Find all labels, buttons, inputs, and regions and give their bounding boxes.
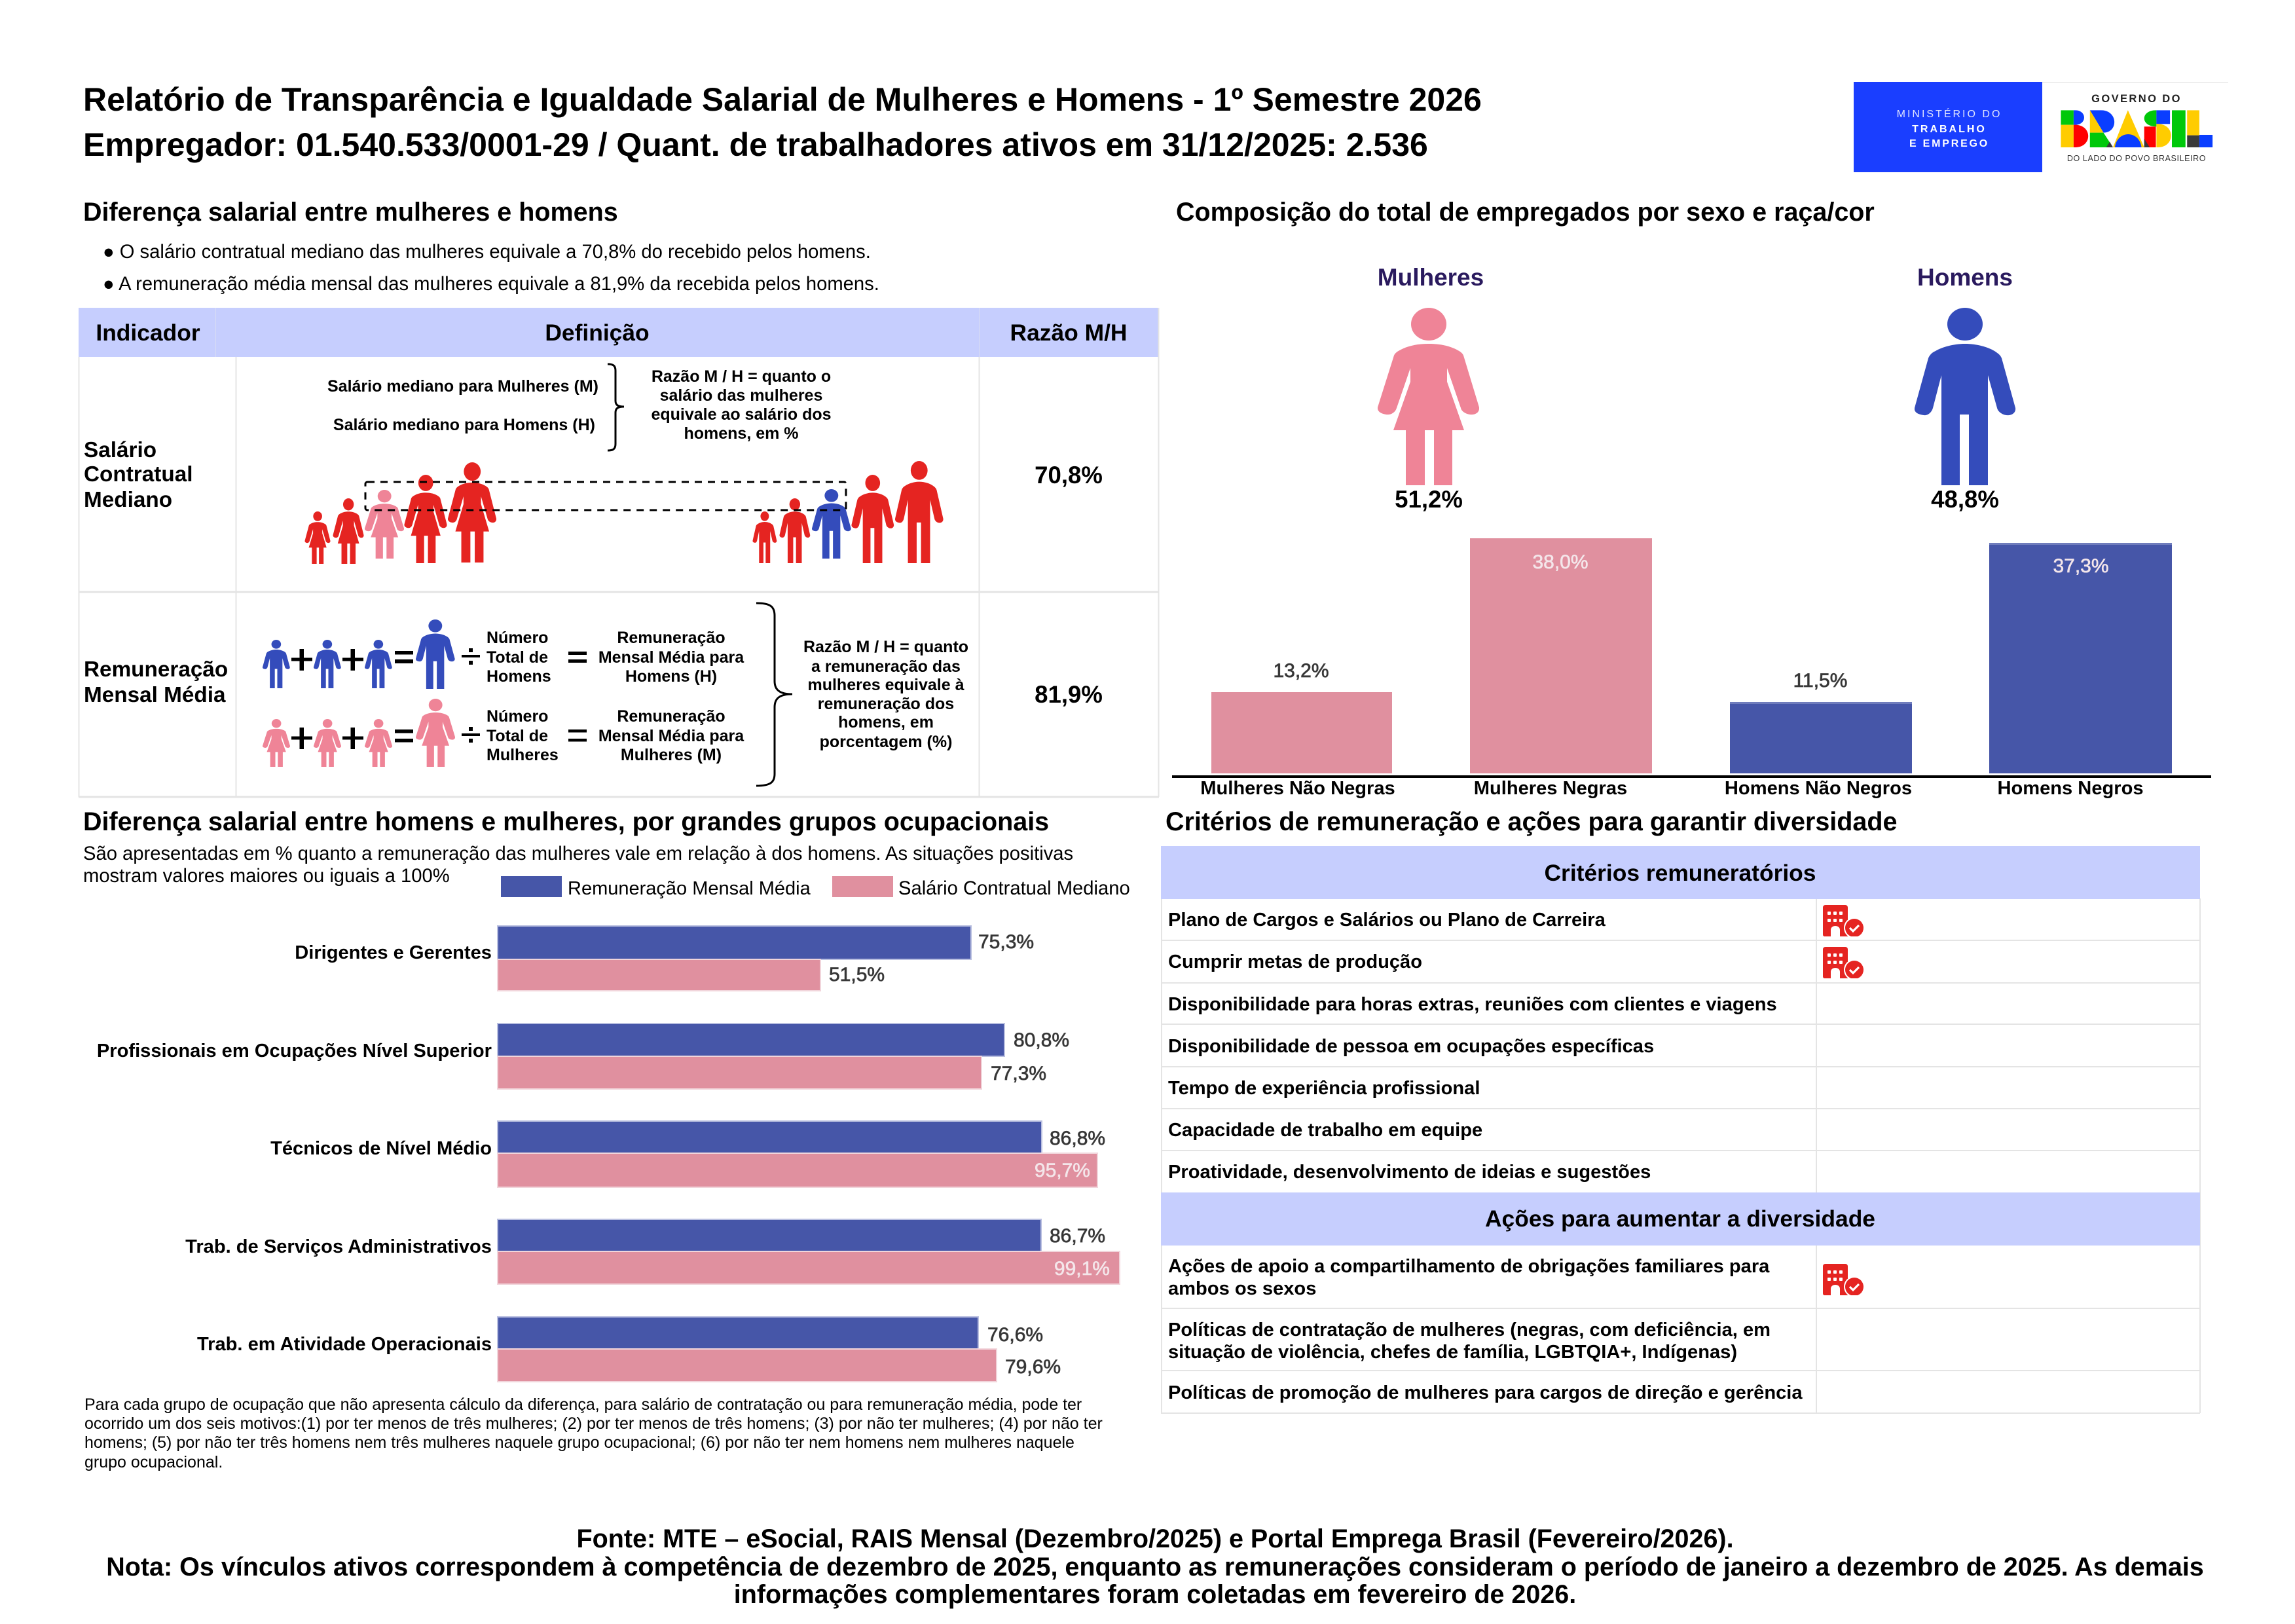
heading: diferença por grupos ocupacionais: Diferença salarial entre homens e mulheres, por grandes grupos ocupacionais: [83, 807, 1049, 836]
group: profissionais: 77,3%: [991, 1063, 1046, 1084]
group: técnicos: Técnicos de Nível Médio: [270, 1138, 492, 1159]
rows: ações: Políticas de contratação de mulheres (negras, com deficiência, em: [1168, 1320, 1771, 1340]
formula: women: Mensal Média para: [598, 727, 744, 745]
rows: critérios: Plano de Cargos e Salários ou Plano de Carreira: [1168, 910, 1606, 931]
row: salário contratual mediano: Salário mediano para Homens (H): [333, 416, 595, 434]
group: profissionais: 80,8%: [1014, 1029, 1069, 1051]
rows: critérios: Proatividade, desenvolvimento de ideias e sugestões: [1168, 1162, 1651, 1183]
row: salário contratual mediano: Contratual: [84, 462, 193, 487]
bar chart: composição por sexo e raça: 11,5%: [1793, 670, 1847, 692]
panel: homens share: 48,8%: [1931, 486, 1999, 513]
row: salário contratual mediano: homens, em %: [684, 424, 799, 443]
icon: building check 1: [1823, 905, 1865, 938]
footnote: [84, 1395, 1103, 1471]
footer: source and note: [106, 1524, 2204, 1609]
panel: homens share: Homens: [1917, 264, 2013, 291]
formula: men: Número: [487, 629, 548, 647]
rows: ações: situação de violência, chefes de família, LGBTQIA+, Indígenas): [1168, 1342, 1737, 1363]
table header: Indicador: [96, 320, 200, 346]
panel: indicator table: [79, 308, 1159, 797]
row: remuneração mensal média: Remuneração: [84, 657, 228, 682]
group: dirigentes e gerentes: 51,5%: [829, 964, 885, 986]
formula: women: Total de: [487, 727, 548, 745]
group: dirigentes e gerentes: Dirigentes e Gerentes: [295, 942, 492, 963]
formula: women: Mulheres: [487, 746, 559, 764]
bar chart: composição por sexo e raça: 37,3%: [2053, 555, 2109, 577]
formula: men: Mensal Média para: [598, 648, 744, 667]
bar chart: composição por sexo e raça: [1172, 538, 2211, 799]
row: remuneração mensal média: remuneração dos: [818, 695, 954, 713]
bar chart: composição por sexo e raça: 38,0%: [1532, 551, 1588, 573]
group: dirigentes e gerentes: 75,3%: [978, 931, 1034, 953]
footnote: ocorrido um dos seis motivos:(1) por ter menos de três mulheres; (2) por ter menos de três homens; (3) por não ter mulheres; (4) por não ter: [84, 1414, 1103, 1433]
row: salário contratual mediano: [84, 364, 1103, 564]
panel: mulheres share: Mulheres: [1378, 264, 1484, 291]
row: salário contratual mediano: salário das mulheres: [660, 386, 822, 405]
row: remuneração mensal média: 81,9%: [1035, 681, 1103, 708]
formula: men: Homens (H): [625, 667, 717, 686]
group: atividade operacionais: 79,6%: [1005, 1356, 1061, 1378]
bullet points: ● A remuneração média mensal das mulheres equivale a 81,9% da recebida pelos homens.: [103, 274, 879, 295]
panel: mulheres share: 51,2%: [1395, 486, 1463, 513]
text: chart description: mostram valores maiores ou iguais a 100%: [83, 866, 450, 887]
group: profissionais: [97, 1024, 1069, 1089]
rows: critérios: Cumprir metas de produção: [1168, 951, 1422, 972]
bar chart: composição por sexo e raça: Mulheres Não Negras: [1200, 778, 1395, 799]
row: remuneração mensal média: homens, em: [838, 713, 934, 731]
bullet points: [103, 242, 879, 295]
header: critérios remuneratórios: Critérios remuneratórios: [1545, 860, 1816, 886]
footnote: grupo ocupacional.: [84, 1453, 223, 1471]
formula: men: Remuneração: [617, 629, 725, 647]
group: serviços administrativos: 86,7%: [1050, 1225, 1105, 1247]
row: remuneração mensal média: porcentagem (%): [820, 733, 952, 751]
logo: governo do brasil: [2042, 82, 2228, 163]
footer: source and note: informações complementares foram coletadas em fevereiro de 2026.: [734, 1580, 1576, 1609]
header: ações: [1161, 1192, 2200, 1246]
title: [83, 81, 1482, 163]
formula: men: [263, 619, 744, 689]
group: técnicos: [270, 1121, 1105, 1187]
formula: women: Remuneração: [617, 707, 725, 726]
title: Relatório de Transparência e Igualdade Salarial de Mulheres e Homens - 1º Semestre 2026: [83, 81, 1482, 118]
table header: [79, 308, 1159, 357]
group: serviços administrativos: [185, 1219, 1120, 1284]
row: remuneração mensal média: [84, 603, 1103, 786]
rows: critérios: Capacidade de trabalho em equipe: [1168, 1120, 1482, 1141]
rows: ações: Ações de apoio a compartilhamento de obrigações familiares para: [1168, 1256, 1770, 1277]
header: critérios remuneratórios: [1161, 846, 2200, 899]
row: salário contratual mediano: Salário: [84, 438, 156, 462]
footer: source and note: Fonte: MTE – eSocial, RAIS Mensal (Dezembro/2025) e Portal Emprega Brasil (Fevereiro/2026).: [576, 1524, 1734, 1553]
group: profissionais: Profissionais em Ocupações Nível Superior: [97, 1041, 492, 1061]
footnote: homens; (5) por não ter três homens nem três mulheres naquele grupo ocupacional; (6) por não ter nem homens nem mulheres naquele: [84, 1433, 1074, 1452]
row: remuneração mensal média: Razão M / H = quanto: [803, 638, 968, 656]
title: Empregador: 01.540.533/0001-29 / Quant. de trabalhadores ativos em 31/12/2025: 2.536: [83, 126, 1428, 163]
logo: ministério do trabalho e emprego: E EMPREGO: [1909, 138, 1989, 149]
logo: ministério do trabalho e emprego: MINISTÉRIO DO: [1897, 107, 2002, 120]
legend: [501, 876, 1130, 899]
legend: Salário Contratual Mediano: [898, 878, 1130, 899]
bullet points: ● O salário contratual mediano das mulheres equivale a 70,8% do recebido pelos homens.: [103, 242, 871, 263]
panel: homens share: [1915, 264, 2015, 513]
row: remuneração mensal média: a remuneração das: [811, 657, 961, 676]
logo: governo do brasil: GOVERNO DO: [2091, 93, 2182, 105]
header: ações: Ações para aumentar a diversidade: [1485, 1206, 1875, 1232]
formula: women: Mulheres (M): [621, 746, 722, 764]
heading: critérios: Critérios de remuneração e ações para garantir diversidade: [1166, 807, 1897, 836]
row: salário contratual mediano: Salário mediano para Mulheres (M): [327, 377, 598, 396]
row: remuneração mensal média: Mensal Média: [84, 683, 226, 707]
group: atividade operacionais: 76,6%: [987, 1324, 1043, 1346]
row: salário contratual mediano: equivale ao salário dos: [651, 405, 832, 424]
bar chart: grupos ocupacionais: [97, 926, 1120, 1382]
formula: men: Total de: [487, 648, 548, 667]
table header: Definição: [545, 320, 650, 346]
rows: critérios: Tempo de experiência profissional: [1168, 1078, 1480, 1099]
group: atividade operacionais: [197, 1317, 1061, 1382]
text: chart description: São apresentadas em % quanto a remuneração das mulheres vale em relação à dos homens. As situações positivas: [83, 843, 1073, 864]
rows: ações: ambos os sexos: [1168, 1278, 1316, 1299]
row: remuneração mensal média: mulheres equivale à: [807, 676, 964, 694]
icon: building check 2: [1823, 947, 1865, 980]
heading: diferença salarial: Diferença salarial entre mulheres e homens: [83, 198, 618, 227]
bar chart: composição por sexo e raça: 13,2%: [1273, 660, 1329, 682]
rows: critérios: [1168, 910, 1777, 1183]
rows: ações: Políticas de promoção de mulheres para cargos de direção e gerência: [1168, 1382, 1803, 1403]
logo: ministério do trabalho e emprego: TRABALHO: [1912, 124, 1987, 135]
logo: ministério do trabalho e emprego: [1854, 82, 2042, 172]
icon: building check 3: [1823, 1264, 1865, 1297]
footer: source and note: Nota: Os vínculos ativos correspondem à competência de dezembro de 2025, enquanto as remunerações consideram o período de janeiro a dezembro de 2025. As demais: [106, 1553, 2204, 1581]
group: dirigentes e gerentes: [295, 926, 1034, 991]
icon: men by salary: [752, 461, 944, 563]
row: salário contratual mediano: 70,8%: [1035, 462, 1103, 489]
group: técnicos: 86,8%: [1050, 1128, 1105, 1149]
bar chart: composição por sexo e raça: Homens Negros: [1997, 778, 2144, 799]
icon: women by salary: [304, 462, 496, 564]
table header: Razão M/H: [1010, 320, 1127, 346]
text: chart description: [83, 843, 1073, 887]
formula: women: Número: [487, 707, 548, 726]
footnote: Para cada grupo de ocupação que não apresenta cálculo da diferença, para salário de contratação ou para remuneração média, pode ter: [84, 1395, 1082, 1414]
group: serviços administrativos: 99,1%: [1054, 1258, 1110, 1280]
row: salário contratual mediano: Mediano: [84, 488, 172, 512]
group: serviços administrativos: Trab. de Serviços Administrativos: [185, 1236, 492, 1257]
bar chart: composição por sexo e raça: Homens Não Negros: [1725, 778, 1912, 799]
rows: ações: [1168, 1256, 1803, 1403]
group: técnicos: 95,7%: [1035, 1160, 1090, 1181]
bar chart: composição por sexo e raça: Mulheres Negras: [1474, 778, 1627, 799]
logo: governo do brasil: DO LADO DO POVO BRASILEIRO: [2067, 154, 2206, 163]
panel: mulheres share: [1378, 264, 1484, 513]
panel: critérios table: [1161, 846, 2200, 1413]
rows: critérios: Disponibilidade de pessoa em ocupações específicas: [1168, 1036, 1654, 1057]
rows: critérios: Disponibilidade para horas extras, reuniões com clientes e viagens: [1168, 994, 1777, 1015]
formula: women: [263, 699, 744, 767]
legend: Remuneração Mensal Média: [568, 878, 811, 899]
group: atividade operacionais: Trab. em Atividade Operacionais: [197, 1334, 492, 1355]
formula: men: Homens: [487, 667, 551, 686]
heading: composição: Composição do total de empregados por sexo e raça/cor: [1176, 198, 1875, 227]
row: salário contratual mediano: Razão M / H = quanto o: [652, 367, 831, 386]
